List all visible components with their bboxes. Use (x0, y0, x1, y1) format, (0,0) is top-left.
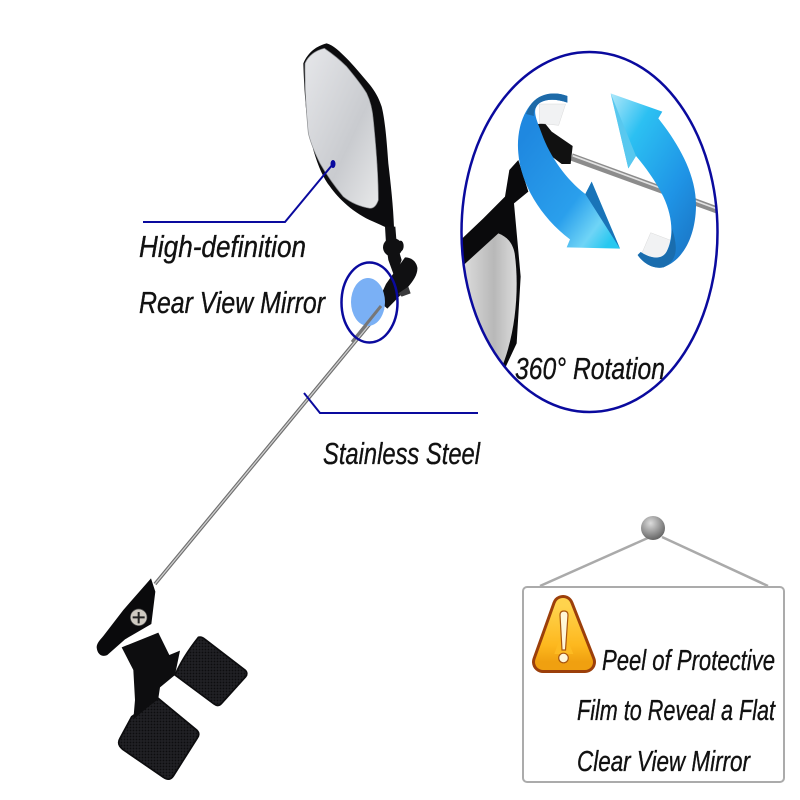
sign text: Clear View Mirror (577, 746, 751, 778)
leader line: mirror (143, 160, 336, 222)
screw (130, 609, 147, 626)
sign hanger (540, 516, 768, 586)
clamp arm (97, 578, 155, 656)
pad: upper right (175, 637, 247, 705)
rod close-up (527, 123, 720, 214)
rear of right arrow (642, 232, 670, 258)
label: 360° Rotation: 360° Rotation (515, 351, 665, 386)
warning sign (523, 516, 784, 782)
rod: stainless steel shaft (155, 308, 383, 584)
sign board (523, 587, 784, 782)
rear view mirror head (303, 43, 394, 227)
label: High-definition Rear View Mirror: Rear View Mirror (139, 285, 326, 320)
small highlight circle (342, 262, 398, 342)
leader line: stainless steel (304, 393, 478, 413)
clip body (122, 633, 180, 719)
swivel joint (378, 227, 417, 309)
label: Stainless Steel: Stainless Steel (323, 436, 481, 471)
rear of left arrow (539, 104, 566, 125)
icon: warning triangle (543, 606, 585, 663)
left rotation arrow (518, 93, 620, 249)
clip mount (97, 578, 247, 779)
right rotation arrow (611, 93, 696, 268)
pad: lower (119, 698, 199, 779)
rotation detail circle (450, 52, 720, 412)
label: High-definition Rear View Mirror: High-definition (139, 229, 306, 264)
mirror close-up (462, 160, 528, 366)
sign text (577, 645, 776, 778)
label: High-definition Rear View Mirror (139, 229, 326, 320)
